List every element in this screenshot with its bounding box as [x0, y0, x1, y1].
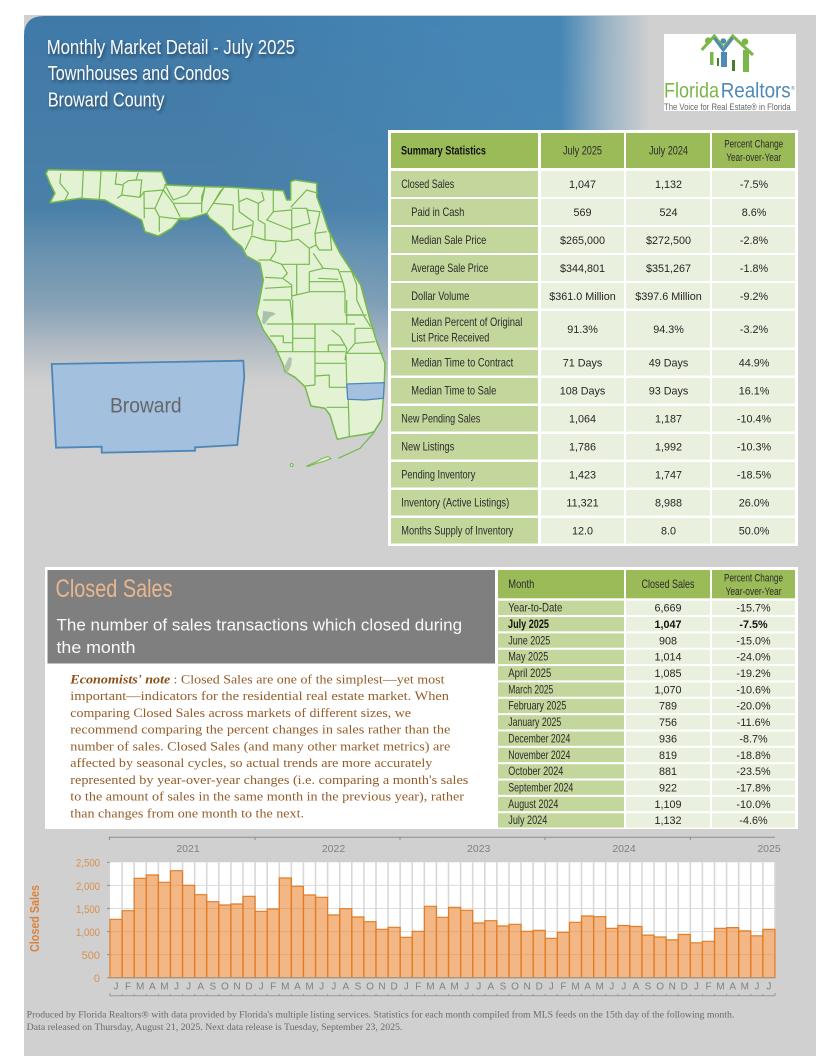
row: Dollar Volume: Dollar Volume — [411, 289, 470, 303]
economists' note — [69, 671, 468, 820]
row: Median Sale Price: Median Sale Price — [411, 233, 487, 247]
economists' note: Economists' note — [69, 671, 171, 686]
row: May 2025: -24.0% — [736, 652, 771, 664]
row: Median Time to Sale: 108 Days — [560, 386, 606, 398]
row: New Listings: New Listings — [401, 440, 454, 454]
row: January 2025: 756 — [659, 717, 677, 729]
row: Dollar Volume — [391, 283, 795, 308]
row: August 2024: August 2024 — [508, 797, 559, 811]
row: July 2024: 1,132 — [654, 815, 682, 827]
row: August 2024 — [498, 797, 795, 811]
row: September 2024 — [498, 780, 795, 795]
row: Pending Inventory: 1,747 — [655, 470, 682, 482]
row: December 2024: December 2024 — [508, 731, 571, 745]
metric description — [56, 616, 462, 657]
row: Months Supply of Inventory — [391, 518, 795, 544]
y axis title: Closed Sales — [27, 885, 42, 952]
row: Paid in Cash: 524 — [659, 207, 678, 219]
row: Median Time to Contract: 49 Days — [649, 358, 689, 370]
row: Median Percent of Original List Price Received: Median Percent of Original — [411, 315, 522, 329]
title: Monthly Market Detail - July 2025 — [47, 37, 295, 59]
row: June 2025 — [498, 633, 795, 648]
row: Median Time to Contract: 71 Days — [563, 358, 603, 370]
row: Year-to-Date: 6,669 — [654, 603, 682, 615]
row: Average Sale Price: $344,801 — [560, 263, 605, 275]
row: Dollar Volume: $397.6 Million — [635, 291, 702, 303]
table header: Closed Sales — [642, 577, 694, 591]
row: Inventory (Active Listings) — [391, 490, 795, 516]
month labels: JFMAMJJASONDJFMAMJJASONDJFMAMJJASONDJFMAMJJASONDJFMAMJJ — [114, 981, 771, 992]
row: New Pending Sales: -10.4% — [737, 414, 771, 426]
row: Median Time to Sale: 93 Days — [649, 386, 689, 398]
economists' note: comparing Closed Sales across markets of different sizes, we — [70, 705, 411, 720]
row: November 2024: -18.8% — [736, 750, 771, 762]
y axis: 0 — [94, 973, 100, 985]
row: Median Time to Contract: 44.9% — [739, 358, 770, 370]
y axis: 1,500 — [76, 904, 100, 916]
state outline — [46, 170, 385, 439]
row: Inventory (Active Listings): 26.0% — [739, 498, 770, 510]
row: Months Supply of Inventory: Months Supply of Inventory — [401, 524, 513, 538]
title: Broward County — [48, 90, 164, 112]
row: Paid in Cash: Paid in Cash — [411, 205, 464, 219]
row: Median Sale Price: -2.8% — [740, 235, 768, 247]
economists' note: than changes from one month to the next. — [70, 805, 304, 820]
economists' note: represented by year-over-year changes (i.e. comparing a month's sales — [70, 772, 468, 787]
row: Year-to-Date — [498, 601, 795, 615]
row: March 2025: March 2025 — [508, 682, 554, 696]
row: July 2024: -4.6% — [739, 815, 768, 827]
table header: Year-over-Year — [726, 586, 782, 598]
row: February 2025: 789 — [659, 701, 677, 713]
metric description: the month — [56, 638, 136, 657]
economists' note: important—indicators for the residential real estate market. When — [70, 688, 450, 703]
y axis: 2,000 — [76, 881, 100, 893]
row: November 2024: 819 — [659, 750, 677, 762]
row: October 2024 — [498, 764, 795, 778]
county boundaries — [60, 171, 383, 437]
row: March 2025: 1,070 — [654, 684, 682, 696]
row: Inventory (Active Listings): 8,988 — [655, 498, 682, 510]
footer note — [27, 1010, 734, 1032]
row: July 2024: July 2024 — [508, 813, 548, 827]
table header — [391, 133, 795, 168]
row: Median Time to Sale — [391, 378, 795, 404]
row: Median Time to Sale: 16.1% — [739, 386, 770, 398]
footer note: Produced by Florida Realtors® with data provided by Florida's multiple listing services. Statistics for each month compiled from MLS feeds on the 15th day of the following month. — [27, 1010, 734, 1020]
row: November 2024: November 2024 — [508, 748, 571, 762]
chart: closed sales by month — [27, 837, 781, 996]
logo wordmark: Realtors — [721, 79, 791, 102]
row: Median Sale Price: $265,000 — [560, 235, 605, 247]
row: New Pending Sales: New Pending Sales — [401, 412, 480, 426]
row: March 2025: -10.6% — [736, 684, 771, 696]
row: New Listings — [391, 434, 795, 460]
Broward county highlight on map — [347, 383, 384, 400]
row: May 2025 — [498, 650, 795, 664]
row: Median Time to Contract — [391, 350, 795, 376]
logo: Florida Realtors — [664, 34, 796, 113]
row: Paid in Cash: 569 — [573, 207, 592, 219]
row: Median Time to Contract: Median Time to Contract — [411, 356, 514, 370]
logo tagline: The Voice for Real Estate® in Florida — [664, 102, 791, 113]
row: Closed Sales: -7.5% — [740, 179, 768, 191]
bars — [110, 871, 775, 978]
row: February 2025: -20.0% — [736, 701, 771, 713]
row: Average Sale Price: $351,267 — [646, 263, 691, 275]
row: Inventory (Active Listings): Inventory (Active Listings) — [401, 496, 509, 510]
heading block — [48, 570, 495, 664]
y axis: 1,000 — [76, 927, 100, 939]
y axis: 500 — [82, 950, 100, 962]
month axis — [110, 993, 775, 996]
panel: summary statistics table — [388, 130, 798, 546]
year axis: 2024 — [612, 843, 636, 855]
footer note: Data released on Thursday, August 21, 2025. Next data release is Tuesday, September 23, 2025. — [27, 1022, 402, 1032]
row: Median Percent of Original List Price Received: -3.2% — [740, 324, 768, 336]
row: Year-to-Date: Year-to-Date — [508, 601, 563, 615]
row: December 2024: 936 — [659, 733, 677, 745]
row: Median Percent of Original List Price Received: 94.3% — [653, 324, 684, 336]
economists' note: to the amount of sales in the same month in the previous year), rather — [70, 788, 465, 804]
row: June 2025: June 2025 — [508, 633, 551, 647]
row: February 2025 — [498, 699, 795, 713]
row: New Pending Sales — [391, 406, 795, 432]
row: Average Sale Price: -1.8% — [740, 263, 768, 275]
table header: Percent Change — [724, 138, 783, 150]
row: Closed Sales: Closed Sales — [401, 177, 454, 191]
row: Average Sale Price — [391, 255, 795, 281]
row: June 2025: -15.0% — [736, 635, 771, 647]
row: October 2024: October 2024 — [508, 764, 564, 778]
row: Inventory (Active Listings): 11,321 — [566, 498, 599, 510]
row: Months Supply of Inventory: 50.0% — [739, 526, 770, 538]
economists' note: : Closed Sales are one of the simplest—yet most — [174, 671, 445, 686]
row: Pending Inventory: Pending Inventory — [401, 468, 475, 482]
row: December 2024 — [498, 731, 795, 746]
row: Median Sale Price — [391, 227, 795, 253]
row: August 2024: -10.0% — [736, 799, 771, 811]
row: January 2025 — [498, 715, 795, 729]
Florida Keys — [290, 419, 382, 466]
economists' note: number of sales. Closed Sales (and many other market metrics) are — [70, 738, 451, 753]
row: February 2025: February 2025 — [508, 699, 567, 713]
row: March 2025 — [498, 682, 795, 697]
year axis: 2023 — [467, 843, 491, 855]
economists' note: recommend comparing the percent changes in sales rather than the — [70, 722, 451, 736]
year axis: 2022 — [322, 843, 345, 855]
row: Paid in Cash: 8.6% — [742, 207, 767, 219]
monthly closed sales table — [498, 570, 795, 828]
panel: Closed Sales — [45, 567, 798, 829]
row: New Pending Sales: 1,064 — [569, 414, 596, 426]
row: Median Time to Sale: Median Time to Sale — [411, 384, 497, 398]
row: Pending Inventory: -18.5% — [737, 470, 771, 482]
row: July 2025 — [498, 617, 795, 631]
row: Months Supply of Inventory: 8.0 — [661, 526, 676, 538]
row: Paid in Cash — [391, 199, 795, 225]
row: September 2024: 922 — [659, 782, 677, 794]
row: New Listings: -10.3% — [737, 442, 771, 454]
row: July 2025: 1,047 — [654, 619, 682, 631]
callout: enlarged Broward county — [52, 361, 244, 453]
row: January 2025: -11.6% — [737, 717, 771, 729]
row: July 2024 — [498, 813, 795, 828]
row: May 2025: 1,014 — [654, 652, 682, 664]
year axis: 2021 — [176, 843, 200, 855]
row: June 2025: 908 — [659, 635, 677, 647]
row: Closed Sales: 1,132 — [655, 179, 682, 191]
row: Year-to-Date: -15.7% — [736, 603, 771, 615]
logo wordmark: ® — [791, 85, 795, 92]
table header: July 2024 — [649, 144, 688, 158]
row: May 2025: May 2025 — [508, 650, 549, 664]
row: New Listings: 1,786 — [569, 442, 596, 454]
row: November 2024 — [498, 748, 795, 762]
row: Dollar Volume: -9.2% — [740, 291, 768, 303]
table header: Summary Statistics — [401, 144, 486, 158]
row: Closed Sales — [391, 171, 795, 197]
row: Median Percent of Original List Price Received: List Price Received — [411, 331, 489, 345]
header background gradient — [24, 16, 650, 400]
logo wordmark — [664, 79, 795, 102]
table header: July 2025 — [563, 144, 602, 158]
table header: Year-over-Year — [726, 152, 781, 164]
logo wordmark: Florida — [664, 79, 719, 102]
row: January 2025: January 2025 — [508, 715, 562, 729]
row: Dollar Volume: $361.0 Million — [549, 291, 616, 303]
row: July 2025: -7.5% — [739, 619, 768, 631]
title — [47, 37, 295, 112]
year axis: 2025 — [757, 843, 781, 855]
table header: Month — [508, 577, 534, 591]
row: Median Sale Price: $272,500 — [646, 235, 691, 247]
row: Months Supply of Inventory: 12.0 — [572, 526, 593, 538]
row: Pending Inventory — [391, 462, 795, 488]
icon: houses and people — [702, 36, 753, 72]
row: October 2024: 881 — [659, 766, 677, 778]
map: Florida counties — [46, 170, 385, 466]
table header — [498, 570, 795, 598]
row: April 2025: April 2025 — [508, 666, 552, 680]
y axis: 2,500 — [76, 858, 100, 870]
row: September 2024: -17.8% — [736, 782, 771, 794]
y axis — [76, 858, 775, 985]
county label: Broward — [110, 395, 182, 418]
row: Median Percent of Original List Price Received: 91.3% — [567, 324, 598, 336]
plot area — [110, 862, 775, 978]
row: April 2025: 1,085 — [654, 668, 682, 680]
row: April 2025: -19.2% — [736, 668, 771, 680]
row: Average Sale Price: Average Sale Price — [411, 261, 489, 275]
row: New Pending Sales: 1,187 — [655, 414, 682, 426]
row: Pending Inventory: 1,423 — [569, 470, 596, 482]
row: July 2025: July 2025 — [508, 617, 549, 631]
heading: Closed Sales — [56, 575, 172, 603]
row: Median Percent of Original List Price Received — [391, 311, 795, 348]
metric description: The number of sales transactions which closed during — [56, 616, 462, 635]
row: New Listings: 1,992 — [655, 442, 682, 454]
row: April 2025 — [498, 666, 795, 680]
table header: Percent Change — [724, 572, 783, 584]
row: October 2024: -23.5% — [736, 766, 771, 778]
bays — [262, 311, 292, 374]
economists' note: affected by seasonal cycles, so actual trends are more accurately — [70, 755, 433, 770]
year axis — [110, 837, 781, 855]
row: Closed Sales: 1,047 — [569, 179, 596, 191]
row: December 2024: -8.7% — [739, 733, 768, 745]
row: August 2024: 1,109 — [654, 799, 682, 811]
row: September 2024: September 2024 — [508, 780, 574, 794]
title: Townhouses and Condos — [48, 63, 229, 85]
